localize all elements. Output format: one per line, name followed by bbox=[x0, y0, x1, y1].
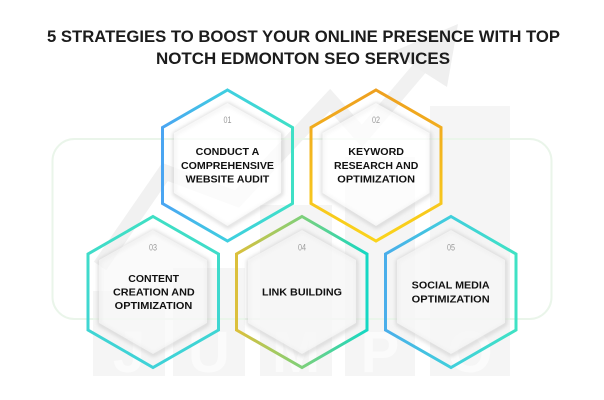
hexagon 03: content creation: CREATION AND bbox=[113, 286, 195, 298]
hexagon 03: content creation: OPTIMIZATION bbox=[115, 300, 192, 312]
background rounded outline panel bbox=[52, 139, 552, 319]
hexagon 05: social media: SOCIAL MEDIA bbox=[412, 280, 490, 292]
background rising arrow bbox=[100, 24, 458, 266]
hexagon 03: content creation: CONTENT bbox=[128, 273, 180, 285]
hexagon 02: keyword research: 02 bbox=[372, 115, 380, 126]
hexagon 01: website audit bbox=[162, 90, 292, 241]
background watermark: bar chart with letters: M bbox=[272, 320, 320, 385]
hexagon 01: website audit: CONDUCT A bbox=[196, 146, 260, 158]
hexagon 04: link building: 04 bbox=[298, 242, 306, 254]
hexagon 01: website audit: WEBSITE AUDIT bbox=[186, 174, 270, 186]
background watermark: bar chart with letters: J bbox=[113, 320, 145, 385]
hexagon 02: keyword research bbox=[311, 90, 441, 241]
hexagon 04: link building: LINK BUILDING bbox=[262, 286, 342, 298]
background watermark: bar chart with letters: O bbox=[447, 320, 493, 385]
hexagon 05: social media bbox=[386, 216, 516, 368]
background watermark: bar chart with letters: U bbox=[188, 320, 230, 385]
title bbox=[47, 27, 560, 68]
hexagon 05: social media: OPTIMIZATION bbox=[412, 293, 490, 305]
hexagon 02: keyword research: KEYWORD bbox=[348, 146, 404, 158]
hexagon 01: website audit: COMPREHENSIVE bbox=[181, 160, 274, 172]
hexagon 04: link building bbox=[236, 216, 367, 368]
background watermark: bar chart with letters: P bbox=[361, 320, 399, 385]
hexagon 01: website audit: 01 bbox=[224, 115, 232, 126]
background watermark: bar chart with letters bbox=[93, 106, 510, 385]
title: 5 STRATEGIES TO BOOST YOUR ONLINE PRESENCE WITH TOP bbox=[47, 27, 560, 46]
title: NOTCH EDMONTON SEO SERVICES bbox=[156, 49, 450, 68]
hexagon 05: social media: 05 bbox=[447, 242, 455, 254]
hexagon 02: keyword research: RESEARCH AND bbox=[334, 160, 419, 172]
hexagon 03: content creation: 03 bbox=[149, 242, 157, 254]
hexagon 02: keyword research: OPTIMIZATION bbox=[337, 174, 415, 186]
hexagon 03: content creation bbox=[88, 216, 218, 368]
